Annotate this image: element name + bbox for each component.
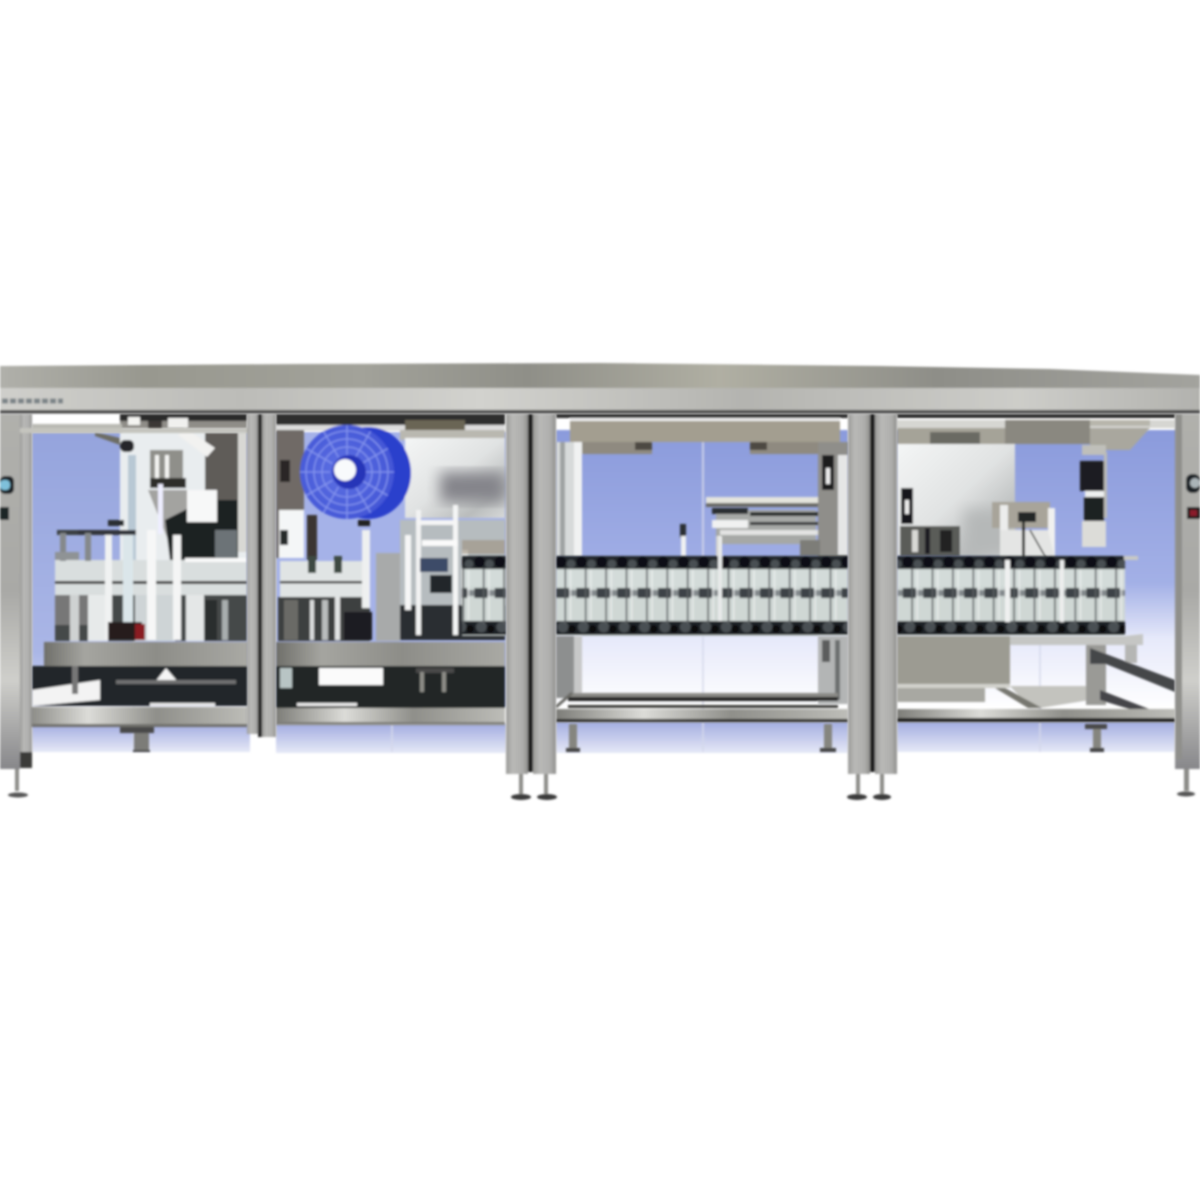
lower mechanism [32,666,248,706]
levelling foot [120,727,154,752]
conveyor uprights [718,536,1064,622]
forming tower [400,505,505,640]
overhead, section 4 [897,414,1175,450]
lower mechanism [276,666,505,708]
main front rail [897,709,1175,722]
right side bracket with sensor [818,442,848,558]
back wall and floor reflection [32,430,1177,753]
logo smudge on canopy [2,398,63,404]
left silver bracket [556,442,582,557]
indicator sensor block [901,488,913,524]
left cabinet post [0,414,248,798]
grey riser [376,553,400,641]
overhead beam, section 3 [556,414,848,454]
bottom rail [20,707,248,727]
upper structure [276,414,505,558]
collecting tank [897,636,1010,702]
section 1: filling station [20,414,248,752]
frame posts [0,414,1200,800]
left support [556,636,582,698]
canopy lower band [0,388,1200,411]
valve cluster [900,526,960,556]
control gauge and button, left [0,476,14,520]
icon: blue film reel [300,425,411,560]
control gauge and button, right [1186,474,1200,519]
vertical cylinders [55,520,247,641]
machine table [276,642,505,666]
right cabinet post [1175,414,1200,796]
drive head unit [992,502,1055,568]
upper sealing unit [706,497,820,558]
post 2 [247,414,276,737]
silver panel, section 4 [897,444,1015,556]
transfer band [280,556,362,597]
central column and chutes [32,414,247,565]
section 4 lower frame [897,634,1175,752]
upper rails [556,693,838,708]
machine table [44,642,248,666]
sensor post [680,524,686,626]
silver back panel [405,438,505,518]
feet [566,724,836,752]
foot [1085,724,1107,752]
top canopy [0,363,1200,414]
section 3 lower frame [556,636,848,752]
chute [995,686,1090,708]
section 2: reel and forming station [276,414,505,725]
outfeed table [1010,634,1143,663]
post 3 pair with feet [506,414,557,800]
main front rail [556,709,848,722]
lower drive columns [278,530,372,641]
bottom rail [276,708,505,725]
servo motor [1080,445,1107,547]
transfer conveyor band [55,558,247,599]
right support [818,636,848,704]
canopy upper band [0,363,1200,389]
diagonal frame [1086,645,1175,722]
section 3 and 4: overhead frames [556,414,1175,626]
bottle conveyor [462,536,1138,636]
post 4 pair with feet [847,414,897,800]
